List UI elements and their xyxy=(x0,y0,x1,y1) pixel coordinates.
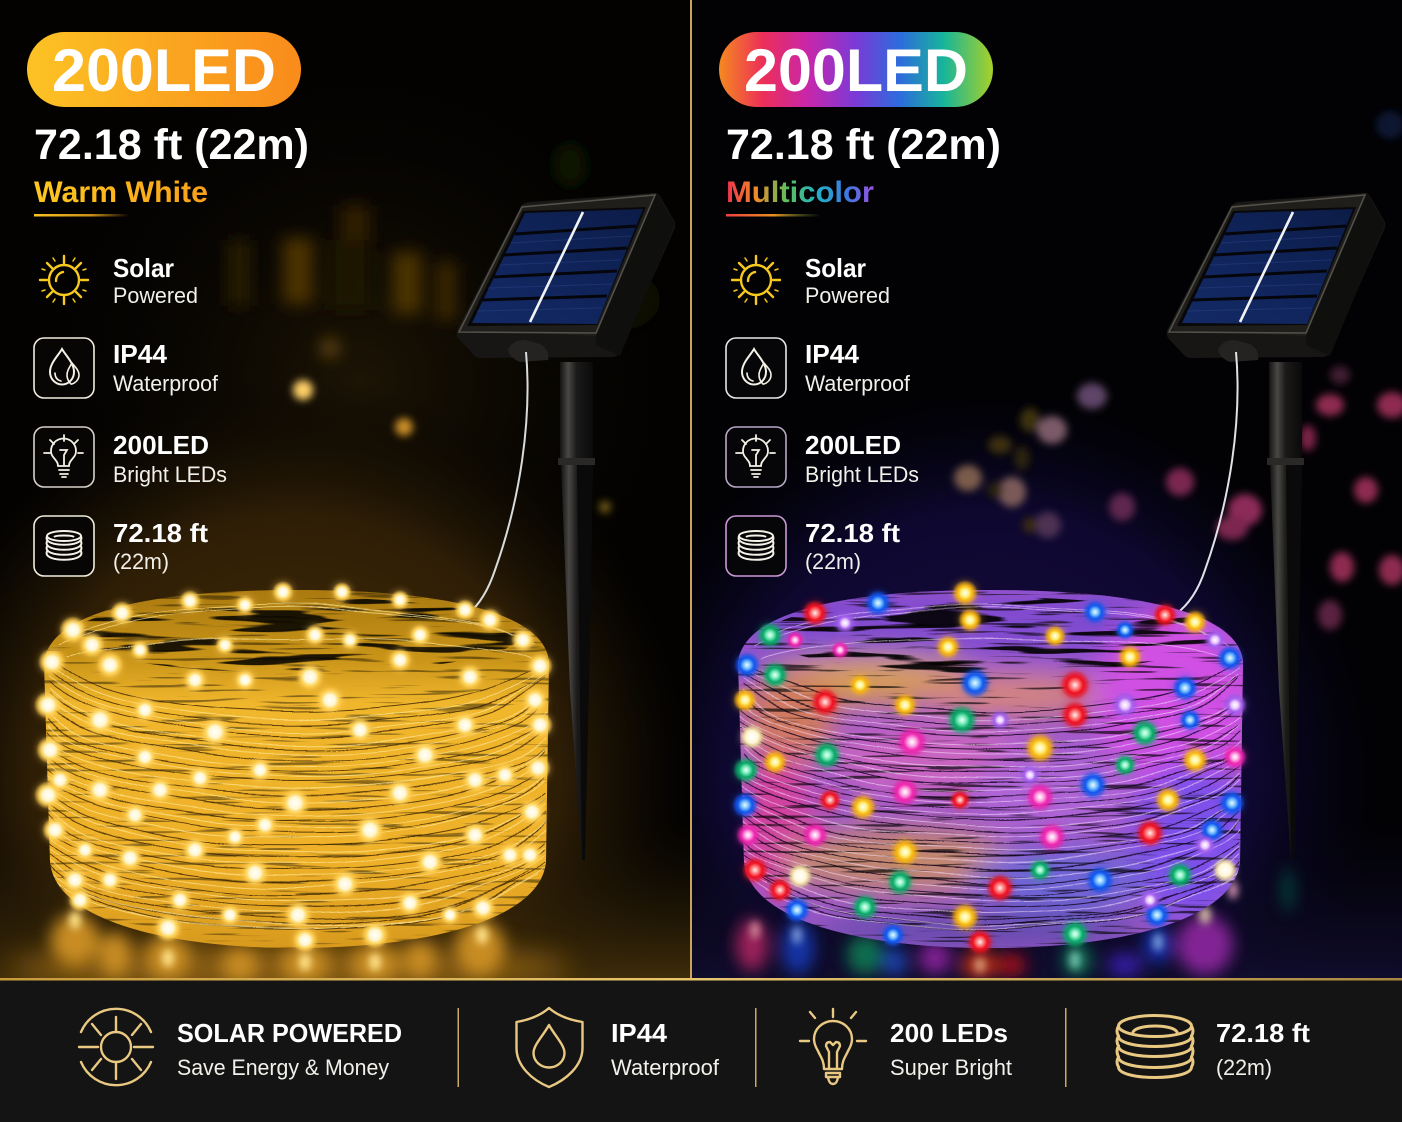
feature: 200LED xyxy=(726,427,919,487)
right header: multicolor xyxy=(719,32,1001,216)
icon: solar panel and stake xyxy=(1167,193,1385,860)
floor glow xyxy=(692,867,1402,978)
item: 200 LEDs: 200 LEDs xyxy=(890,1018,1008,1048)
left features list xyxy=(34,253,227,576)
item: length: 72.18 ft xyxy=(1216,1018,1310,1048)
feature: 200LED: Bright LEDs xyxy=(113,462,227,487)
LEDs xyxy=(732,580,1247,955)
item: IP44 xyxy=(516,1008,720,1087)
coiled multicolor string lights xyxy=(732,580,1255,955)
item: 200 LEDs xyxy=(800,1009,1012,1084)
icon: shield with drop xyxy=(516,1008,582,1087)
feature: solar xyxy=(40,253,198,308)
item: IP44: Waterproof xyxy=(611,1055,720,1080)
feature: solar: Solar xyxy=(805,253,866,283)
feature: solar: Solar xyxy=(113,253,174,283)
garden bokeh background xyxy=(228,143,660,357)
floor reflections xyxy=(51,911,504,982)
feature: 200LED: 200LED xyxy=(805,430,901,460)
panel: multicolor xyxy=(692,106,1402,978)
icon: sun in circle xyxy=(79,1009,153,1085)
feature: IP44: Waterproof xyxy=(113,371,219,396)
left header: warm white xyxy=(27,32,309,216)
item: solar powered: Save Energy & Money xyxy=(177,1055,389,1080)
feature: length: (22m) xyxy=(805,549,861,574)
floor and coil glow xyxy=(0,860,690,978)
bokeh lights xyxy=(293,380,611,513)
item: solar powered: SOLAR POWERED xyxy=(177,1018,402,1048)
feature: IP44 xyxy=(726,338,911,398)
item: solar powered xyxy=(79,1009,402,1085)
icon: solar panel and stake xyxy=(457,193,675,860)
feature: IP44: IP44 xyxy=(805,339,860,369)
feature: solar: Powered xyxy=(113,283,198,308)
icon: coil xyxy=(1117,1016,1193,1078)
coiled warm white string lights xyxy=(34,581,555,955)
feature: length xyxy=(726,516,900,576)
heading: colour: Warm White xyxy=(34,176,208,209)
flower garden bokeh background xyxy=(954,111,1402,630)
feature: length: 72.18 ft xyxy=(805,518,900,548)
item: IP44: IP44 xyxy=(611,1018,668,1048)
icon: light bulb xyxy=(800,1009,866,1084)
colored floor reflections xyxy=(736,868,1293,979)
feature: 200LED: Bright LEDs xyxy=(805,462,919,487)
feature: solar: Powered xyxy=(805,283,890,308)
item: length xyxy=(1117,1016,1310,1080)
feature: solar xyxy=(732,253,890,308)
feature: IP44: IP44 xyxy=(113,339,168,369)
badge: 200LED warm: 200LED xyxy=(52,37,276,104)
divider xyxy=(690,0,692,978)
right features list xyxy=(726,253,919,576)
bottom feature bar xyxy=(0,978,1402,1122)
item: length: (22m) xyxy=(1216,1055,1272,1080)
feature: 200LED: 200LED xyxy=(113,430,209,460)
heading: length: 72.18 ft (22m) xyxy=(726,121,1001,169)
feature: IP44: Waterproof xyxy=(805,371,911,396)
feature: length xyxy=(34,516,208,576)
heading: length: 72.18 ft (22m) xyxy=(34,121,309,169)
feature: length: (22m) xyxy=(113,549,169,574)
LEDs xyxy=(34,581,553,953)
item: 200 LEDs: Super Bright xyxy=(890,1055,1012,1080)
feature: length: 72.18 ft xyxy=(113,518,208,548)
badge: 200LED rainbow: 200LED xyxy=(744,37,968,104)
feature: 200LED xyxy=(34,427,227,487)
feature: IP44 xyxy=(34,338,219,398)
panel: warm white xyxy=(0,140,690,978)
heading: colour: Multicolor xyxy=(726,176,874,209)
